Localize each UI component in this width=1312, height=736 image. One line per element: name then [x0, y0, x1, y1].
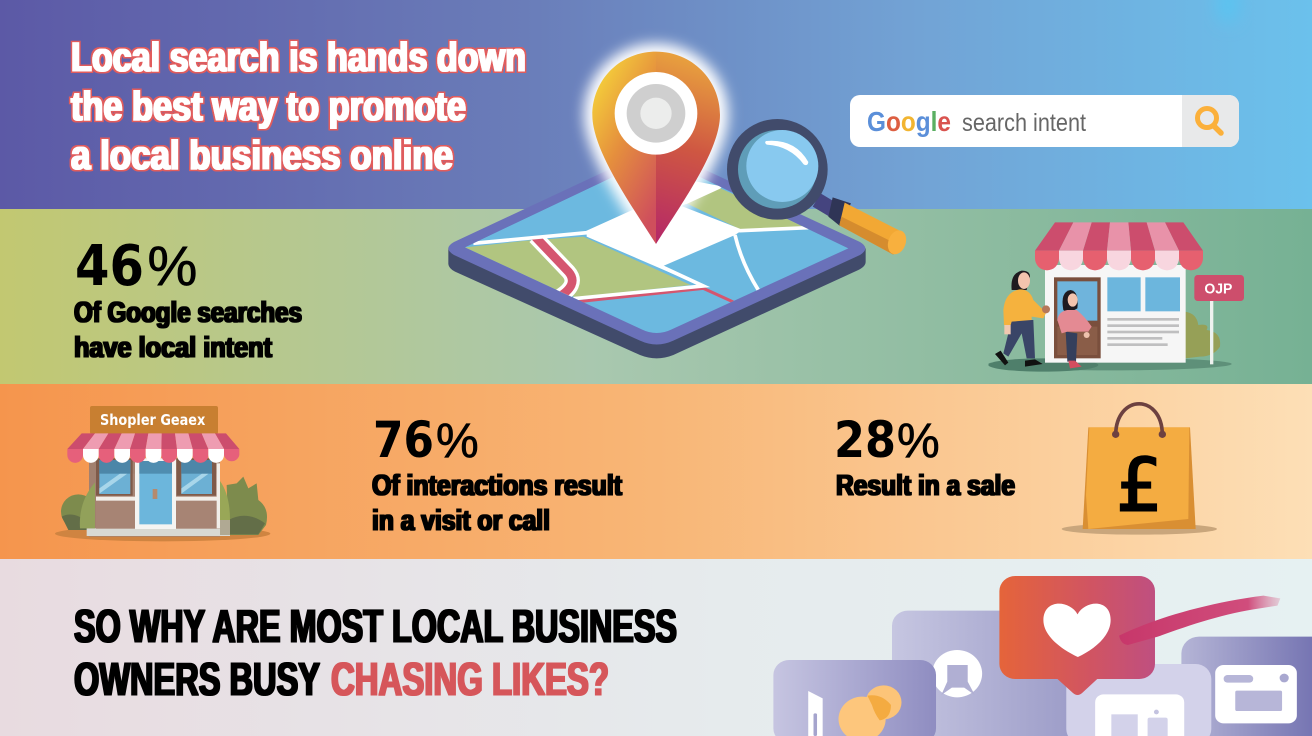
- ground shadow: [55, 526, 270, 541]
- building: [1045, 265, 1186, 363]
- pin glow: [592, 52, 720, 244]
- band: 46 percent background: [0, 209, 1312, 384]
- left side wedge: [80, 482, 95, 528]
- lens highlight: [765, 141, 808, 165]
- customer in pink: [1057, 290, 1092, 368]
- pin right half: [656, 52, 720, 244]
- title: [71, 34, 526, 178]
- building walls: [89, 458, 220, 537]
- sign: [1194, 275, 1244, 364]
- caption 76%: Of interactions result: [372, 470, 622, 502]
- bag sides: [1083, 427, 1196, 529]
- pin left half: [592, 52, 656, 244]
- decorative blue glow top right: [1216, 0, 1240, 24]
- caption 46%: Of Google searches: [74, 297, 302, 329]
- band: closing question background: [0, 559, 1312, 736]
- map base side: [448, 248, 866, 358]
- left window: [96, 458, 133, 496]
- bag handle: [1112, 404, 1166, 438]
- map green field left: [465, 237, 691, 297]
- map frame: [448, 151, 865, 344]
- pound sign: £: [1116, 444, 1162, 528]
- brush stroke: [1119, 596, 1280, 645]
- caption 46%: [74, 297, 302, 364]
- title: a local business online: [71, 132, 453, 178]
- handle neck: [817, 200, 833, 210]
- map surface: [465, 157, 848, 333]
- search bar: [850, 95, 1239, 147]
- map lower red road: [578, 288, 733, 302]
- map white centre: [586, 182, 740, 275]
- bush: [1185, 312, 1220, 358]
- figure 46%: 46: [75, 234, 144, 299]
- awning: [1035, 222, 1203, 270]
- handle grip: [839, 203, 902, 255]
- title: the best way to promote: [71, 83, 466, 129]
- sign board: [90, 406, 218, 434]
- sign: OJP: [1204, 281, 1233, 297]
- map blue area top left: [476, 180, 634, 242]
- figure 76%: %: [436, 415, 479, 468]
- caption 76%: [372, 470, 622, 537]
- icon: shopping bag with pound sign: [1062, 404, 1217, 535]
- windows: [1107, 277, 1180, 311]
- card back with avatar: [892, 611, 1075, 736]
- map green field right: [687, 187, 808, 230]
- caption 46%: have local intent: [74, 332, 272, 364]
- search button: [1182, 95, 1239, 147]
- like speech bubble: [999, 576, 1155, 695]
- illustration: isometric map with pin and magnifier: [448, 52, 909, 358]
- search text: search intent: [962, 109, 1086, 137]
- google logo: Google: [867, 106, 951, 137]
- closing question: [74, 600, 677, 705]
- icon: heart: [1043, 604, 1111, 657]
- search box: [850, 95, 1239, 147]
- closing question: SO WHY ARE MOST LOCAL BUSINESS: [74, 600, 677, 652]
- closing question: OWNERS BUSY: [74, 653, 320, 705]
- magnifying glass: [727, 119, 909, 257]
- highlighted phrase: CHASING LIKES?: [331, 653, 609, 705]
- door: [1054, 277, 1101, 358]
- figure 76%: 76: [373, 411, 434, 469]
- figure 28%: 28: [834, 411, 896, 469]
- title: Local search is hands down: [71, 34, 526, 80]
- bag front: [1086, 427, 1189, 529]
- lens: [738, 130, 817, 209]
- caption 76%: in a visit or call: [372, 505, 550, 537]
- card middle: [1066, 664, 1211, 736]
- pin centre: [615, 72, 697, 155]
- bag shadow: [1062, 523, 1217, 535]
- text lines: [1107, 318, 1179, 346]
- right side wedge: [217, 463, 230, 535]
- card right: [1181, 637, 1312, 736]
- map white roads: [473, 187, 808, 299]
- illustration: storefront: [55, 406, 270, 541]
- right bush: [227, 477, 267, 535]
- illustration: shop with two customers: [988, 222, 1244, 372]
- map red road: [535, 237, 572, 298]
- sign text: Shopler Geaex: [100, 411, 205, 429]
- location pin: [592, 52, 720, 244]
- band: orange stats background: [0, 384, 1312, 559]
- card front with pushpin: [773, 660, 936, 736]
- door: [135, 458, 176, 529]
- awning: [67, 433, 239, 463]
- illustration: social media cards: [773, 576, 1312, 736]
- window frame band: [96, 497, 220, 501]
- left bush: [61, 494, 96, 530]
- right window: [177, 458, 216, 496]
- ground shadow: [988, 358, 1232, 370]
- stat: 46 percent: [74, 234, 302, 364]
- stat: 28 percent: [834, 411, 1015, 502]
- customer in yellow: [995, 271, 1050, 367]
- band: header background: [0, 0, 1312, 210]
- figure 28%: %: [897, 415, 940, 468]
- map details: [466, 180, 808, 302]
- figure 46%: %: [148, 234, 197, 297]
- handle ferrule: [828, 197, 851, 226]
- caption 28%: Result in a sale: [836, 470, 1015, 502]
- icon: search: [1198, 108, 1221, 133]
- stat: 76 percent: [372, 411, 622, 537]
- lens rim: [727, 119, 828, 220]
